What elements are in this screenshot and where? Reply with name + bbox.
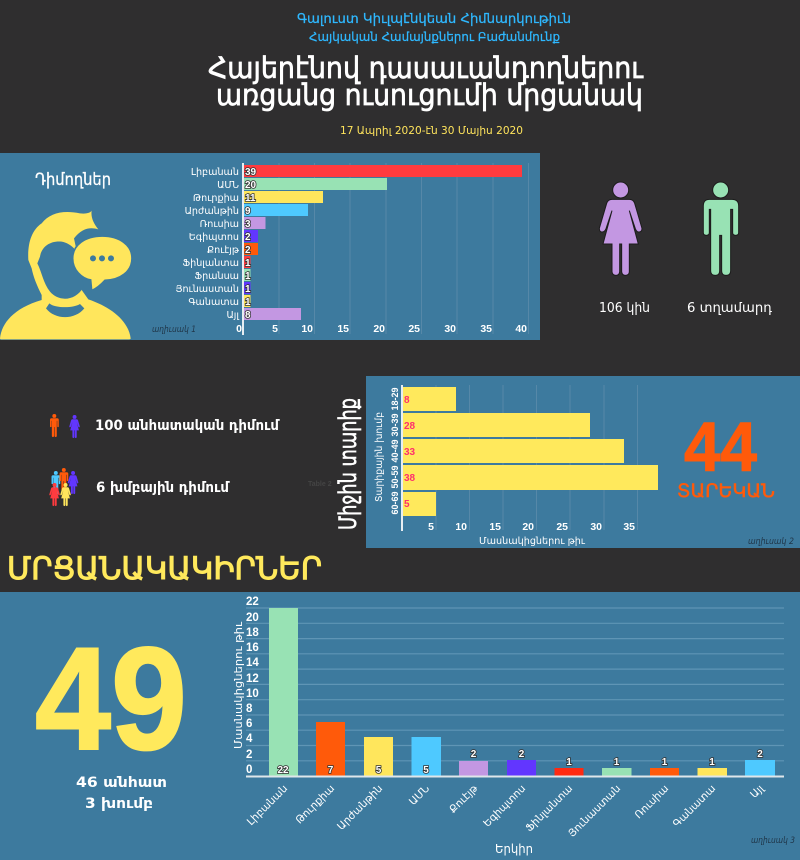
- bar chart: winners by country: Յունաստան: [566, 783, 623, 840]
- icon: man: [703, 182, 739, 275]
- faint table label: Table 2: [308, 481, 332, 488]
- main title line 2: առցանց ուսուցումի մրցանակ: [216, 78, 643, 112]
- bar chart: winners by country: 1: [614, 757, 620, 768]
- bar chart: applicants by country: 20: [373, 323, 385, 335]
- icon: person with speech bubble: [0, 211, 132, 339]
- organisation name: Գալուստ Կիւլպէնկեան Հիմնարկութիւն: [297, 11, 571, 27]
- label: individual winners: 46 անհատ: [76, 775, 167, 791]
- bar chart: winners by country: 22: [277, 765, 289, 776]
- bar chart: applicants by country: Քուէյթ: [207, 245, 240, 256]
- bar chart: applicants by country: Արժանթին: [185, 206, 239, 217]
- bar chart: participants by age group: 20: [522, 521, 534, 533]
- bar chart: participants by age group: Տարիքային խումբ: [374, 412, 385, 502]
- department name: Հայկական Համայնքներու Բաժանմունք: [309, 29, 560, 44]
- rotated heading: average age: Միջին տարիք: [334, 398, 362, 530]
- label: years old: ՏԱՐԵԿԱՆ: [677, 480, 775, 502]
- panel heading: Դիմողներ: [35, 170, 111, 189]
- bar chart: winners by country: Լիբանան: [245, 783, 290, 828]
- bar chart: applicants by country: 8: [245, 310, 251, 321]
- icon: individual applicants: [50, 414, 80, 438]
- bar chart: participants by age group: 5: [428, 521, 434, 533]
- bar chart: winners by country: Երկիր: [495, 842, 533, 856]
- icon: woman: [599, 182, 642, 275]
- big number: winners: 49: [35, 617, 187, 780]
- bar chart: winners by country: Քուէյթ: [447, 782, 480, 816]
- section heading: prize winners: ՄՐՑԱՆԱԿԱԿԻՐՆԵՐ: [7, 551, 322, 587]
- bar chart: applicants by country: Յունաստան: [175, 284, 239, 295]
- bar chart: winners by country: 4: [246, 733, 253, 745]
- label: women count: 106 կին: [599, 301, 650, 316]
- bar chart: winners by country: 2: [519, 749, 525, 760]
- panel: age groups: [366, 376, 800, 548]
- label: individual applications: 100 անհատական դիմում: [95, 418, 280, 434]
- bar chart: winners by country: Ֆինլանտա: [523, 783, 575, 834]
- label: group winners: 3 խումբ: [85, 796, 153, 812]
- panel: winners: [0, 592, 800, 860]
- bar chart: winners by country: 1: [566, 757, 572, 768]
- caption: table 3: աղիւսակ 3: [751, 836, 795, 846]
- bar chart: winners by country: 1: [662, 757, 668, 768]
- bar chart: applicants by country: 1: [245, 297, 251, 308]
- bar chart: winners by country: 12: [246, 673, 259, 685]
- bar chart: applicants by country: 35: [480, 323, 492, 335]
- bar chart: applicants by country: 2: [245, 232, 251, 243]
- bar chart: applicants by country: [175, 163, 528, 335]
- bar chart: winners by country: Գանատա: [671, 783, 718, 830]
- bar chart: participants by age group: 30: [590, 521, 602, 533]
- bar chart: applicants by country: 2: [245, 245, 251, 256]
- bar chart: participants by age group: 5: [404, 499, 410, 510]
- bar chart: applicants by country: Գանատա: [188, 297, 239, 308]
- bar chart: winners by country: Թուրքիա: [293, 783, 337, 826]
- bar chart: applicants by country: ԱՄՆ: [217, 180, 239, 191]
- bar chart: participants by age group: 60-69: [390, 491, 400, 515]
- bar chart: participants by age group: 15: [489, 521, 501, 533]
- label: men count: 6 տղամարդ: [687, 301, 772, 316]
- bar chart: applicants by country: 3: [245, 219, 251, 230]
- label: group applications: 6 խմբային դիմում: [96, 480, 230, 496]
- bar chart: applicants by country: Լիբանան: [191, 167, 239, 178]
- bar chart: applicants by country: Ռուսիա: [200, 219, 239, 230]
- bar chart: winners by country: Այլ: [748, 782, 767, 801]
- bar chart: winners by country: ԱՄՆ: [407, 782, 432, 808]
- bar chart: winners by country: 5: [376, 765, 382, 776]
- bar chart: participants by age group: 25: [556, 521, 568, 533]
- bar chart: winners by country: 2: [757, 749, 763, 760]
- bar chart: applicants by country: 15: [337, 323, 349, 335]
- caption: table 2: աղիւսակ 2: [748, 537, 794, 547]
- bar chart: applicants by country: 5: [272, 323, 278, 335]
- bar chart: winners by country: 0: [246, 764, 252, 776]
- bar chart: participants by age group: 8: [404, 395, 410, 406]
- bar chart: applicants by country: 9: [245, 206, 251, 217]
- bar chart: winners by country: 2: [246, 749, 252, 761]
- big number: average age: 44: [684, 408, 757, 486]
- bar chart: applicants by country: 40: [515, 323, 527, 335]
- bar chart: applicants by country: Ֆրանսա: [194, 271, 239, 282]
- bar chart: winners by country: Արժանթին: [335, 783, 385, 833]
- bar chart: winners by country: 7: [328, 765, 334, 776]
- bar chart: applicants by country: Թուրքիա: [193, 193, 239, 204]
- bar chart: applicants by country: 10: [301, 323, 313, 335]
- bar chart: participants by age group: 28: [404, 421, 416, 432]
- bar chart: participants by age group: 30-39: [390, 413, 400, 437]
- bar chart: winners by country: 18: [246, 627, 259, 639]
- bar chart: winners by country: Մասնակիցներու թիւ: [232, 622, 245, 749]
- bar chart: participants by age group: [374, 385, 658, 547]
- bar chart: participants by age group: 35: [623, 521, 635, 533]
- bar chart: applicants by country: 0: [236, 323, 242, 335]
- bar chart: winners by country: 6: [246, 718, 252, 730]
- panel: applicants by country: [0, 153, 540, 340]
- bar chart: applicants by country: 1: [245, 271, 251, 282]
- panel: application types: [49, 414, 332, 506]
- bar chart: winners by country: 16: [246, 642, 259, 654]
- bar chart: applicants by country: 1: [245, 284, 251, 295]
- bar chart: applicants by country: 30: [444, 323, 456, 335]
- bar chart: winners by country: 20: [246, 612, 259, 624]
- date range: 17 Ապրիլ 2020-էն 30 Մայիս 2020: [340, 124, 523, 137]
- bar chart: participants by age group: Մասնակիցներու թիւ: [479, 536, 586, 547]
- bar chart: applicants by country: Ֆինլանտա: [183, 258, 239, 269]
- bar chart: applicants by country: Այլ: [226, 310, 239, 321]
- bar chart: applicants by country: Եգիպտոս: [189, 232, 239, 243]
- bar chart: participants by age group: 50-59: [390, 465, 400, 489]
- bar chart: winners by country: 5: [423, 765, 429, 776]
- header: organisation and title: [208, 11, 644, 137]
- icon: group applicants: [49, 468, 78, 506]
- bar chart: participants by age group: 10: [455, 521, 467, 533]
- bar chart: winners by country: 8: [246, 703, 253, 715]
- bar chart: participants by age group: 40-49: [390, 439, 400, 463]
- bar chart: participants by age group: 18-29: [390, 387, 400, 411]
- bar chart: applicants by country: 39: [245, 167, 257, 178]
- bar chart: applicants by country: 20: [245, 180, 257, 191]
- bar chart: winners by country: 1: [709, 757, 715, 768]
- bar chart: winners by country: Եգիպտոս: [481, 783, 528, 830]
- bar chart: winners by country: 10: [246, 688, 259, 700]
- caption: table 1: աղիւսակ 1: [152, 325, 196, 335]
- main title line 1: Հայերէնով դասաւանդողներու: [208, 51, 644, 85]
- panel: gender split: [599, 182, 772, 316]
- bar chart: participants by age group: 38: [404, 473, 416, 484]
- bar chart: winners by country: Ռուսիա: [632, 783, 671, 821]
- bar chart: applicants by country: 25: [408, 323, 420, 335]
- bar chart: winners by country: 2: [471, 749, 477, 760]
- bar chart: applicants by country: 11: [245, 193, 256, 204]
- bar chart: winners by country: 14: [246, 657, 259, 669]
- bar chart: winners by country: [232, 596, 784, 856]
- bar chart: winners by country: 22: [246, 596, 259, 608]
- bar chart: applicants by country: 1: [245, 258, 251, 269]
- bar chart: participants by age group: 33: [404, 447, 416, 458]
